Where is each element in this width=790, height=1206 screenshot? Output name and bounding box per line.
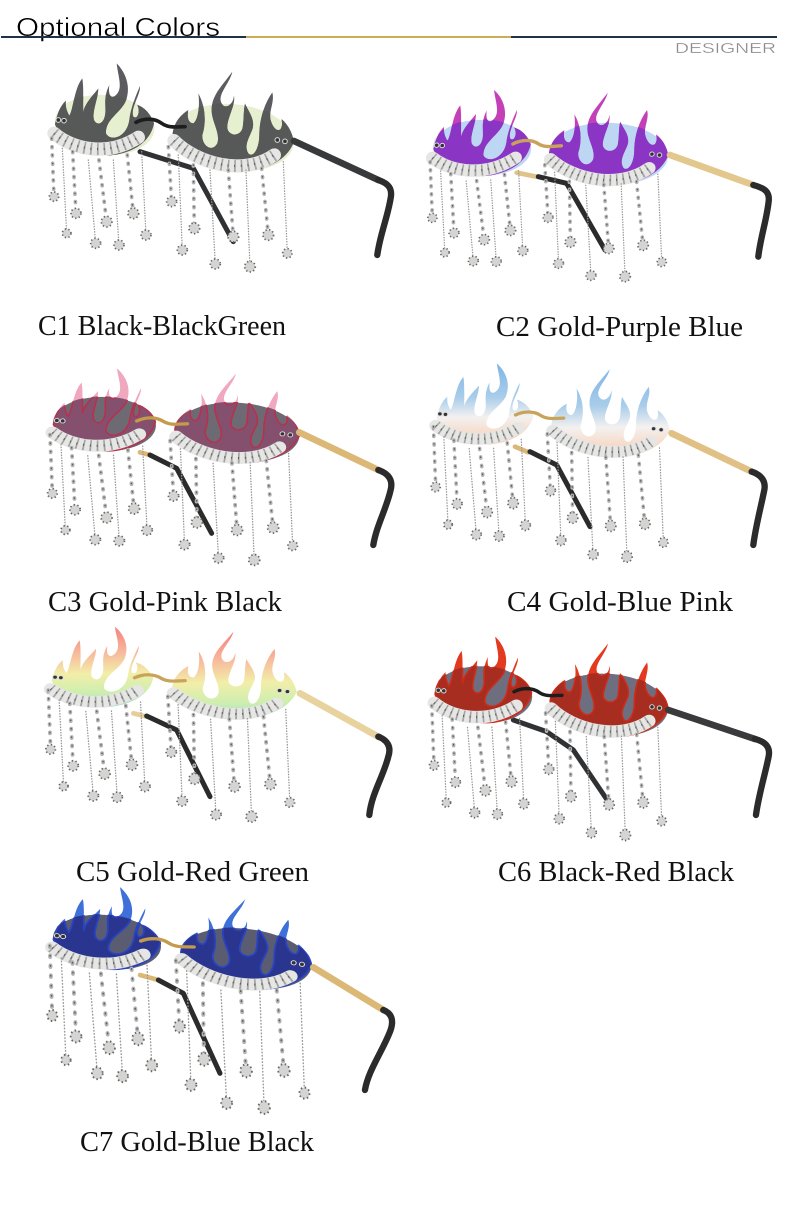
panel: C3 Gold-Pink Black <box>48 365 391 618</box>
caption: C7: C7 Gold-Blue Black <box>80 1127 314 1158</box>
caption: C6: C6 Black-Red Black <box>498 857 734 888</box>
panel: C6 Black-Red Black <box>429 635 769 888</box>
panel: C2 Gold-Purple Blue <box>428 82 769 343</box>
caption: C1: C1 Black-BlackGreen <box>38 311 286 342</box>
glasses: C3 <box>48 365 391 570</box>
glasses: C7 <box>47 884 392 1116</box>
glasses: C6 <box>429 635 769 842</box>
glasses: C1 <box>49 63 391 272</box>
panel: C5 Gold-Red Green <box>46 623 389 888</box>
panel: C7 Gold-Blue Black <box>47 884 392 1158</box>
panel: C1 Black-BlackGreen <box>38 63 391 342</box>
title: Optional Colors: Optional Colors <box>16 12 220 42</box>
caption: C5: C5 Gold-Red Green <box>76 857 309 888</box>
glasses: C2 <box>428 82 769 291</box>
caption: C2: C2 Gold-Purple Blue <box>496 312 743 343</box>
glasses: C5 <box>46 623 389 826</box>
panel: C4 Gold-Blue Pink <box>431 361 765 618</box>
caption: C4: C4 Gold-Blue Pink <box>507 587 733 618</box>
caption: C3: C3 Gold-Pink Black <box>48 587 282 618</box>
label: DESIGNER: DESIGNER <box>675 40 776 57</box>
glasses: C4 <box>431 361 765 565</box>
